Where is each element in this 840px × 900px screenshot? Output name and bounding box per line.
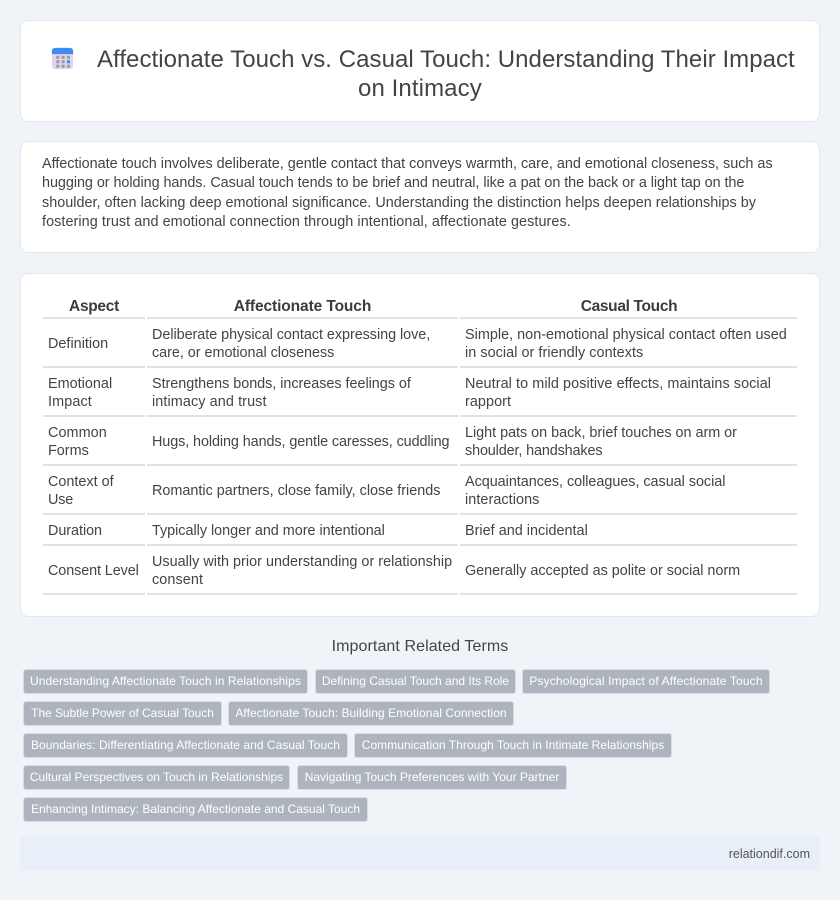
tag: Cultural Perspectives on Touch in Relationships xyxy=(30,770,283,784)
title xyxy=(97,46,795,102)
panel: title card xyxy=(20,20,820,122)
tag: The Subtle Power of Casual Touch xyxy=(31,706,214,720)
tag xyxy=(522,669,770,694)
row: duration: Typically longer and more intentional xyxy=(152,523,385,539)
tag xyxy=(23,701,222,726)
footer credit: relationdif.com xyxy=(729,847,810,861)
row: context of use: Romantic partners, close family, close friends xyxy=(152,483,440,499)
row: emotional impact: rapport xyxy=(465,394,511,410)
row: context of use xyxy=(48,474,725,508)
heading: related terms: Important Related Terms xyxy=(332,638,508,655)
tag: Boundaries: Differentiating Affectionate and Casual Touch xyxy=(31,738,340,752)
tag xyxy=(23,765,290,790)
row: emotional impact: Neutral to mild positive effects, maintains social xyxy=(465,376,771,392)
intro paragraph xyxy=(42,156,773,230)
row: emotional impact xyxy=(48,376,771,410)
row: definition: Simple, non-emotional physical contact often used xyxy=(465,327,787,343)
tag xyxy=(297,765,567,790)
row: definition: in social or friendly contexts xyxy=(465,345,643,361)
tag: Navigating Touch Preferences with Your Partner xyxy=(305,770,559,784)
tag xyxy=(354,733,672,758)
table header: Aspect xyxy=(69,298,119,315)
tag xyxy=(315,669,516,694)
row: consent level: consent xyxy=(152,572,203,588)
row: common forms: Light pats on back, brief touches on arm or xyxy=(465,425,737,441)
row: emotional impact: intimacy and trust xyxy=(152,394,267,410)
tag: Communication Through Touch in Intimate Relationships xyxy=(362,738,664,752)
tag: Defining Casual Touch and Its Role xyxy=(322,674,509,688)
tag xyxy=(23,733,348,758)
row: consent level: Consent Level xyxy=(48,563,139,579)
row: context of use: Acquaintances, colleagues, casual social xyxy=(465,474,725,490)
panel: intro text xyxy=(20,141,820,253)
row: definition: Definition xyxy=(48,336,108,352)
title: Affectionate Touch vs. Casual Touch: Understanding Their Impact xyxy=(97,46,795,73)
table header xyxy=(69,298,677,315)
title: on Intimacy xyxy=(358,75,482,102)
tag: Psychological Impact of Affectionate Touch xyxy=(529,674,763,688)
row: emotional impact: Emotional xyxy=(48,376,112,392)
tag: Enhancing Intimacy: Balancing Affectionate and Casual Touch xyxy=(31,802,360,816)
row: duration: Duration xyxy=(48,523,102,539)
footer xyxy=(20,836,820,870)
row: definition: care, or emotional closeness xyxy=(152,345,334,361)
row: duration: Brief and incidental xyxy=(465,523,588,539)
table header: Casual Touch xyxy=(581,298,677,315)
row: context of use: Context of xyxy=(48,474,114,490)
row: common forms: Common xyxy=(48,425,107,441)
row: context of use: Use xyxy=(48,492,73,508)
row: definition: Deliberate physical contact expressing love, xyxy=(152,327,430,343)
intro paragraph: Affectionate touch involves deliberate, gentle contact that conveys warmth, care, and emotional closeness, such as xyxy=(42,156,773,172)
row: context of use: interactions xyxy=(465,492,539,508)
tag xyxy=(23,669,308,694)
row: definition xyxy=(48,327,787,361)
row: common forms: Forms xyxy=(48,443,89,459)
table header: Affectionate Touch xyxy=(234,298,371,315)
row: common forms: Hugs, holding hands, gentle caresses, cuddling xyxy=(152,434,449,450)
tag: Understanding Affectionate Touch in Relationships xyxy=(30,674,301,688)
intro paragraph: fostering trust and emotional connection through intentional, affectionate gestures. xyxy=(42,214,571,230)
panel: comparison table xyxy=(20,273,820,617)
related term tags xyxy=(23,669,770,822)
row: consent level: Generally accepted as polite or social norm xyxy=(465,563,740,579)
intro paragraph: hugging or holding hands. Casual touch tends to be brief and neutral, like a pat on the back or a light tap on the xyxy=(42,175,744,191)
intro paragraph: shoulder, often lacking deep emotional significance. Understanding the distinction helps deepen relationships by xyxy=(42,195,756,211)
row: consent level xyxy=(48,554,740,588)
tag xyxy=(23,797,368,822)
row: consent level: Usually with prior understanding or relationship xyxy=(152,554,452,570)
row: emotional impact: Strengthens bonds, increases feelings of xyxy=(152,376,411,392)
tag xyxy=(228,701,514,726)
icon: calendar xyxy=(52,48,74,70)
row: duration xyxy=(48,523,588,539)
row: common forms: shoulder, handshakes xyxy=(465,443,602,459)
row: common forms xyxy=(48,425,737,459)
row: emotional impact: Impact xyxy=(48,394,92,410)
tag: Affectionate Touch: Building Emotional Connection xyxy=(235,706,507,720)
